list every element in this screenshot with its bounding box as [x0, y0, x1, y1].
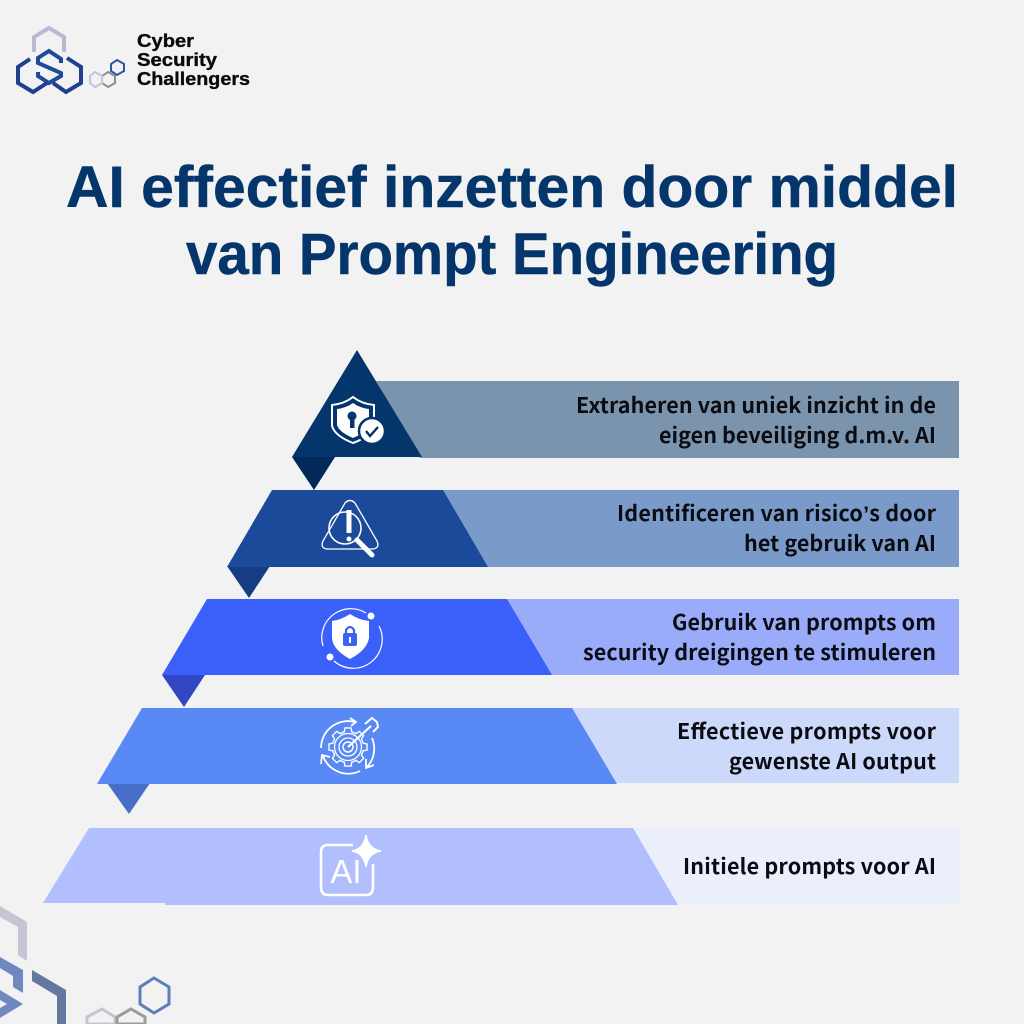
ribbon: [505, 599, 959, 675]
text: [677, 715, 937, 776]
tier 4: effectieve prompts: [97, 708, 959, 814]
logo wordmark: [137, 30, 250, 89]
text: Extraheren van uniek inzicht in de: [576, 389, 936, 420]
fold: [107, 783, 150, 814]
text: eigen beveiliging d.m.v. AI: [659, 419, 936, 450]
logo wordmark: Challengers: [137, 68, 250, 89]
text: [617, 497, 937, 558]
triangle: [292, 350, 422, 457]
ribbon: [570, 708, 959, 783]
logo: [18, 28, 250, 92]
ribbon: [440, 490, 959, 567]
icon: warning with magnifier: [322, 500, 378, 555]
icon: shield with lock: [322, 609, 382, 668]
text: Effectieve prompts voor: [677, 715, 937, 746]
fold: [292, 457, 335, 490]
trapezoid: [227, 490, 488, 567]
title: [66, 155, 958, 287]
text: Initiele prompts voor AI: [683, 850, 936, 881]
ribbon: [630, 828, 959, 904]
ribbon: [376, 381, 959, 458]
tier 3: prompts security: [162, 599, 959, 707]
tier 5: initiele prompts: [43, 828, 959, 905]
fold: [162, 675, 205, 707]
icon: target and gear: [321, 718, 378, 774]
logo wordmark: Cyber: [137, 30, 194, 51]
logo mark: hexagons: [18, 28, 124, 92]
tier 1: eigen beveiliging: [292, 350, 959, 490]
text: [583, 606, 936, 667]
trapezoid: [162, 599, 552, 675]
text: Gebruik van prompts om: [672, 606, 936, 637]
trapezoid: [97, 708, 617, 784]
decorative hexagon cluster: bottom left: [0, 906, 169, 1024]
title: van Prompt Engineering: [186, 222, 838, 287]
trapezoid: [43, 828, 678, 905]
text: Identificeren van risico’s door: [617, 497, 937, 528]
logo wordmark: Security: [137, 49, 218, 70]
fold: [227, 566, 270, 598]
text: security dreigingen te stimuleren: [583, 636, 936, 667]
icon: AI sparkle: AI: [330, 853, 362, 890]
icon: AI sparkle: [321, 835, 381, 895]
tier 2: risico's: [227, 490, 959, 598]
text: het gebruik van AI: [744, 527, 936, 558]
text: [576, 389, 936, 450]
title: AI effectief inzetten door middel: [66, 155, 958, 220]
text: gewenste AI output: [729, 745, 936, 776]
icon: shield with check: [332, 397, 385, 444]
